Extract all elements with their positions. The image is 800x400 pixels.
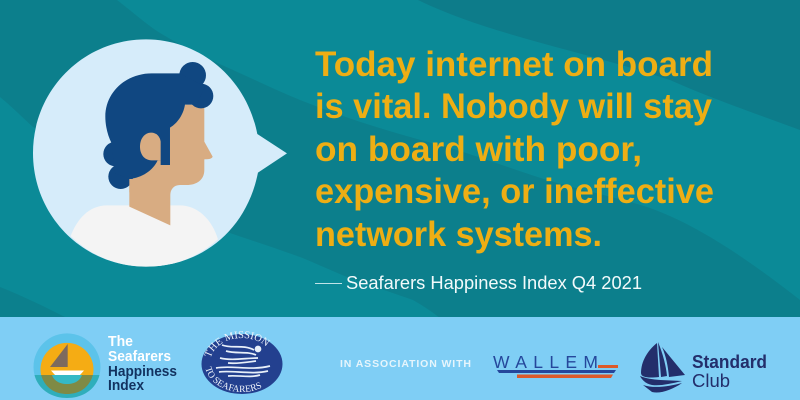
quote text: is vital. Nobody will stay <box>315 87 713 126</box>
attribution: Seafarers Happiness Index Q4 2021 <box>346 273 642 293</box>
quote text: on board with poor, <box>315 130 642 169</box>
logo wordmark: Seafarers <box>108 349 171 365</box>
emblem: flying angel <box>216 345 270 376</box>
neck patch <box>129 179 139 192</box>
logo: Wallem <box>493 352 618 378</box>
quote text: expensive, or ineffective <box>315 172 714 211</box>
icon: sailing ship <box>640 342 685 393</box>
footer band <box>0 317 800 400</box>
hair <box>103 62 213 189</box>
logo wordmark: Index <box>108 378 144 394</box>
quote text <box>315 45 714 254</box>
logo wordmark: Happiness <box>108 364 177 380</box>
shirt <box>71 205 218 267</box>
logo: Wallem: WALLEM <box>493 352 598 372</box>
emblem lettering: THE MISSION <box>204 331 270 356</box>
logo: Standard Club: Standard <box>692 352 767 372</box>
panel: speech bubble portrait <box>33 39 287 267</box>
teal background with waves <box>0 0 800 318</box>
logo wordmark: The <box>108 334 133 350</box>
logo: Standard Club: Club <box>692 371 730 391</box>
quote text: Today internet on board <box>315 45 713 84</box>
speech bubble <box>33 39 287 267</box>
icon: sailing boat in sun <box>34 333 101 398</box>
neck and face <box>129 105 213 225</box>
logo: Seafarers Happiness Index <box>34 333 177 398</box>
association label: IN ASSOCIATION WITH <box>340 358 471 370</box>
quote text: network systems. <box>315 215 602 254</box>
logo: The Mission to Seafarers: TO SEAFARERS <box>206 366 262 392</box>
logo: The Mission to Seafarers <box>202 331 282 394</box>
logo: Standard Club <box>640 342 767 393</box>
logo wordmark <box>108 334 177 394</box>
ear <box>140 133 161 160</box>
